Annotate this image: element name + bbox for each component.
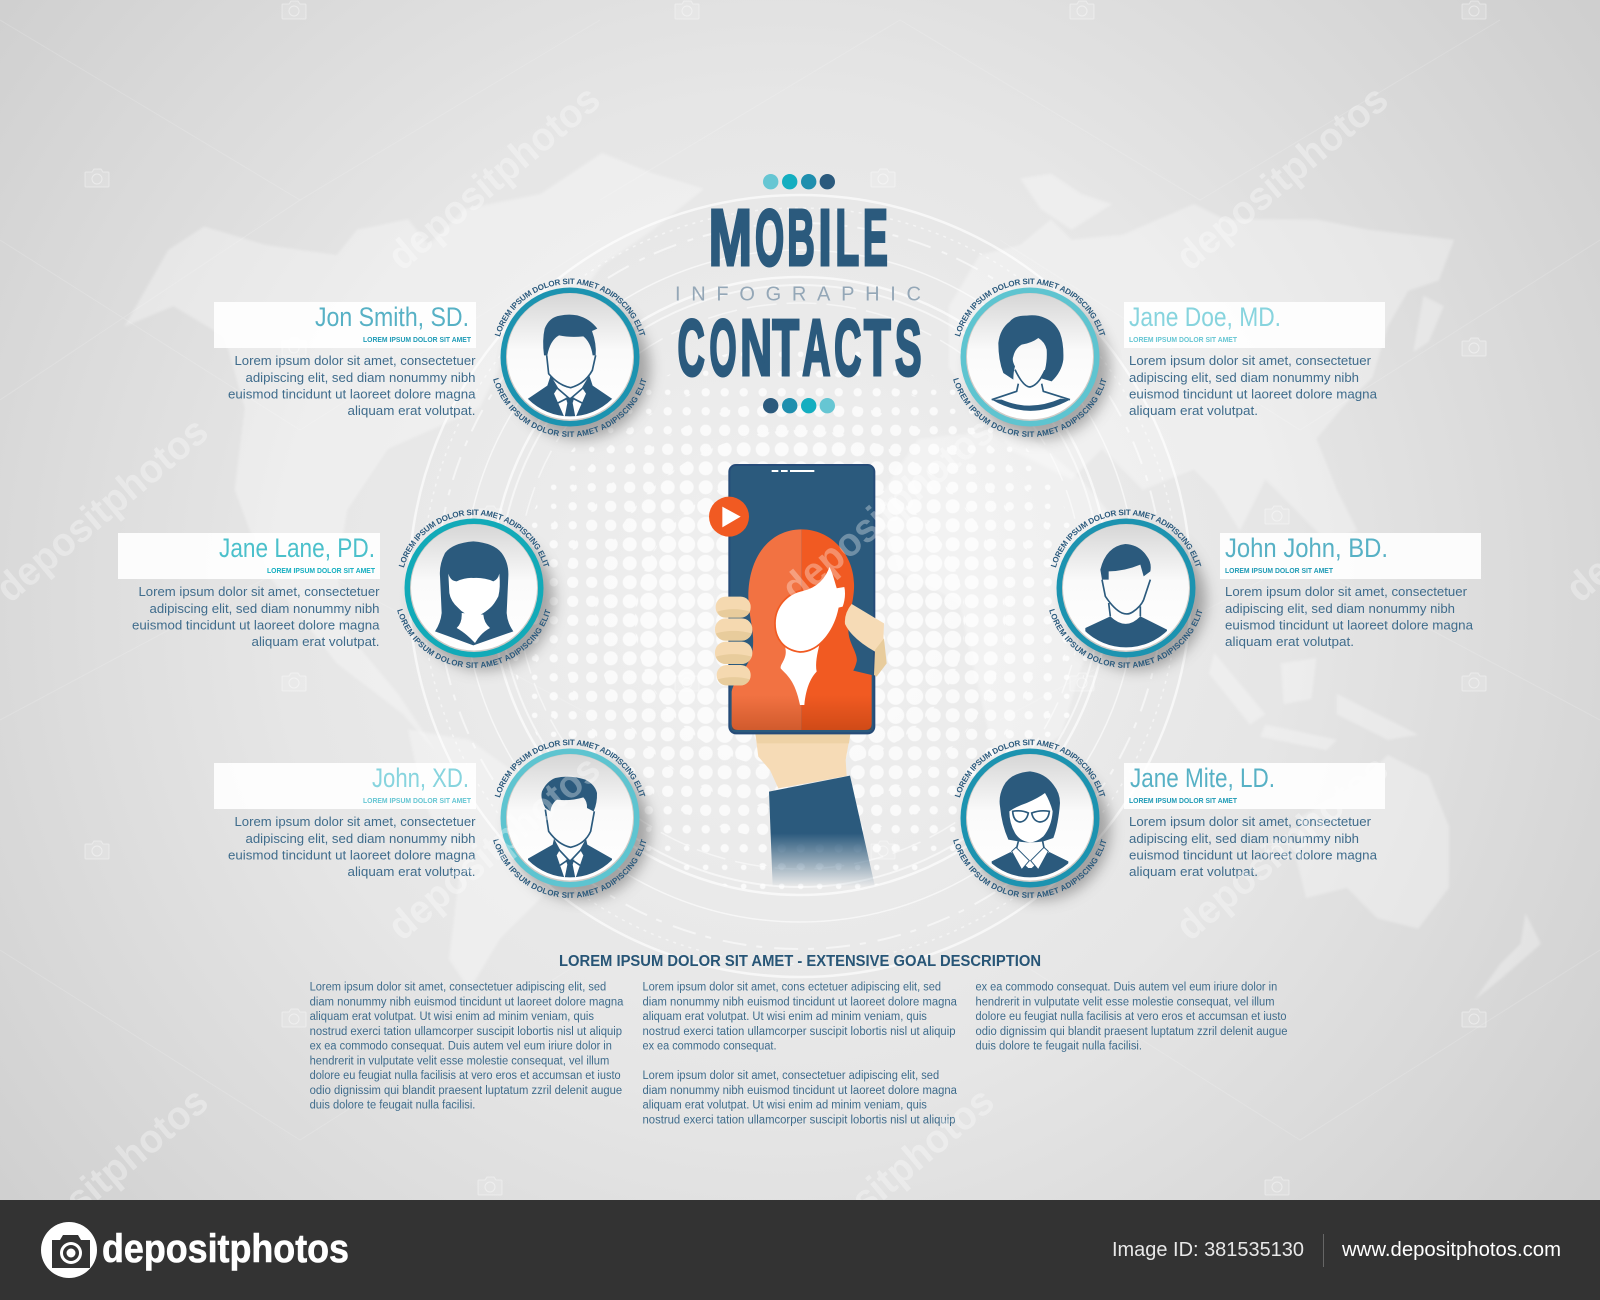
description (1225, 584, 1474, 649)
title top dots (763, 174, 835, 189)
phone body (729, 465, 874, 733)
avatar badge: LOREM IPSUM DOLOR SIT AMET ADIPISCING ELIT (493, 378, 646, 437)
avatar badge (953, 278, 1118, 447)
title: CONTACTS: O (709, 303, 737, 392)
card: Jane Doe (953, 278, 1385, 447)
card: John John (1049, 510, 1481, 678)
text column 1: Lorem ipsum dolor sit amet, consectetuer adipiscing elit, sed (310, 982, 606, 994)
avatar badge: LOREM IPSUM DOLOR SIT AMET ADIPISCING ELIT (953, 838, 1106, 898)
name band: LOREM IPSUM DOLOR SIT AMET (1129, 796, 1237, 805)
heading: goal description: LOREM IPSUM DOLOR SIT AMET - EXTENSIVE GOAL DESCRIPTION (559, 953, 1041, 970)
name band: Jane Mite, LD. (1130, 763, 1275, 793)
name band: LOREM IPSUM DOLOR SIT AMET (1129, 335, 1237, 344)
name band: LOREM IPSUM DOLOR SIT AMET (363, 335, 471, 344)
name band (1124, 763, 1385, 809)
concentric rings (409, 195, 1191, 977)
description: aliquam erat volutpat. (1225, 634, 1354, 649)
text column 2: nostrud exerci tation ullamcorper suscipit lobortis nisl ut aliquip (642, 1114, 956, 1126)
title: MOBILE: I (818, 193, 832, 282)
description: euismod tincidunt ut laoreet dolore magna (228, 387, 476, 402)
footer logo (41, 1222, 349, 1278)
avatar badge: LOREM IPSUM DOLOR SIT AMET ADIPISCING ELIT (397, 608, 550, 668)
text column 1: dolore eu feugiat nulla facilisis at vero eros et accumsan et iusto (310, 1070, 621, 1082)
text column 3: ex ea commodo consequat. Duis autem vel eum iriure dolor in (976, 982, 1277, 994)
footer logo: depositphotos (102, 1227, 349, 1271)
name band (214, 763, 476, 809)
text column 1: diam nonummy nibh euismod tincidunt ut laoreet dolore magna (310, 996, 624, 1008)
card: John XD (214, 740, 658, 908)
avatar badge: LOREM IPSUM DOLOR SIT AMET ADIPISCING ELIT (494, 278, 646, 336)
fingers (715, 597, 752, 685)
stock watermarks: depositphotos (774, 1079, 1002, 1281)
title bottom dots (763, 398, 835, 413)
avatar badge: LOREM IPSUM DOLOR SIT AMET ADIPISCING ELIT (1049, 608, 1202, 668)
avatar badge: LOREM IPSUM DOLOR SIT AMET ADIPISCING ELIT (953, 378, 1106, 437)
description: Lorem ipsum dolor sit amet, consectetuer (234, 814, 476, 829)
text column 2 (642, 982, 957, 1126)
description: euismod tincidunt ut laoreet dolore magna (132, 618, 380, 633)
avatar badge (493, 740, 658, 908)
title: CONTACTS (678, 303, 922, 392)
avatar badge (1049, 510, 1214, 678)
avatar badge (493, 278, 658, 446)
stock watermarks: depositphotos (1168, 77, 1396, 279)
description: Lorem ipsum dolor sit amet, consectetuer (234, 353, 476, 368)
website: www.depositphotos.com (1341, 1239, 1561, 1261)
description (1129, 353, 1378, 418)
title: MOBILE: B (787, 193, 815, 282)
text column 2: Lorem ipsum dolor sit amet, consectetuer adipiscing elit, sed (642, 1070, 939, 1082)
illustration: hand holding phone (709, 465, 887, 887)
avatar badge: LOREM IPSUM DOLOR SIT AMET ADIPISCING ELIT (954, 740, 1106, 798)
description: Lorem ipsum dolor sit amet, consectetuer (1129, 353, 1372, 368)
name band: John, XD. (372, 763, 469, 793)
title: MOBILE: O (755, 193, 784, 282)
description: Lorem ipsum dolor sit amet, consectetuer (138, 584, 380, 599)
text column 3 (976, 982, 1288, 1052)
title: CONTACTS: C (834, 303, 861, 392)
description: aliquam erat volutpat. (1129, 864, 1258, 879)
name band: Jane Doe, MD. (1129, 302, 1281, 332)
text column 1: duis dolore te feugait nulla facilisi. (310, 1100, 475, 1112)
video portrait (732, 529, 872, 730)
text column 3: dolore eu feugiat nulla facilisis at vero eros et accumsan et iusto (976, 1011, 1286, 1023)
name band: LOREM IPSUM DOLOR SIT AMET (267, 566, 375, 575)
title block (675, 174, 922, 413)
stock watermarks: depositphotos (774, 409, 1002, 611)
description: adipiscing elit, sed diam nonummy nibh (1129, 831, 1359, 846)
image id: Image ID: 381535130 (1112, 1239, 1304, 1261)
description (228, 353, 476, 418)
name band: Jane Lane, PD. (219, 533, 375, 563)
description: aliquam erat volutpat. (348, 864, 476, 879)
subtitle: INFOGRAPHIC: INFOGRAPHIC (675, 284, 921, 306)
thumb (845, 604, 887, 677)
title: MOBILE (709, 193, 888, 282)
stock watermarks: depositphotos (1168, 747, 1396, 949)
stock watermarks: depositphotos (380, 77, 608, 279)
description: aliquam erat volutpat. (252, 634, 380, 649)
description: adipiscing elit, sed diam nonummy nibh (1225, 601, 1455, 616)
text column 1 (310, 982, 624, 1112)
phone speaker (772, 470, 814, 472)
text column 2: Lorem ipsum dolor sit amet, cons ectetuer adipiscing elit, sed (642, 982, 941, 994)
text column 1: ex ea commodo consequat. Duis autem vel eum iriure dolor in (310, 1040, 612, 1052)
text column 2: aliquam erat volutpat. Ut wisi enim ad minim veniam, quis (642, 1011, 927, 1023)
avatar badge: LOREM IPSUM DOLOR SIT AMET ADIPISCING ELIT (1050, 510, 1202, 568)
description: euismod tincidunt ut laoreet dolore magna (228, 848, 476, 863)
palm (755, 732, 851, 788)
text column 2: aliquam erat volutpat. Ut wisi enim ad minim veniam, quis (642, 1100, 927, 1112)
card: Jane Lane (118, 510, 562, 678)
text column 1: nostrud exerci tation ullamcorper suscipit lobortis nisl ut aliquip (310, 1026, 622, 1038)
stock watermarks: depositphotos (380, 747, 608, 949)
avatar badge: LOREM IPSUM DOLOR SIT AMET ADIPISCING ELIT (494, 740, 646, 798)
description: euismod tincidunt ut laoreet dolore magna (1129, 848, 1378, 863)
description: aliquam erat volutpat. (348, 403, 476, 418)
title: CONTACTS: C (678, 303, 705, 392)
card: Jon Smith (214, 278, 658, 446)
text column 2: ex ea commodo consequat. (642, 1040, 776, 1052)
title: CONTACTS: T (772, 303, 799, 392)
name band: John John, BD. (1225, 533, 1388, 563)
title: CONTACTS: S (895, 303, 922, 392)
description: adipiscing elit, sed diam nonummy nibh (246, 831, 476, 846)
text column 3: duis dolore te feugait nulla facilisi. (976, 1040, 1142, 1052)
card: Jane Mite (953, 740, 1385, 908)
description (132, 584, 380, 649)
title: CONTACTS: N (740, 303, 772, 392)
description: adipiscing elit, sed diam nonummy nibh (246, 370, 476, 385)
text column 2: diam nonummy nibh euismod tincidunt ut laoreet dolore magna (642, 996, 957, 1008)
avatar badge: LOREM IPSUM DOLOR SIT AMET ADIPISCING ELIT (954, 278, 1106, 336)
title: CONTACTS: T (864, 303, 891, 392)
name band: Jon Smith, SD. (315, 302, 469, 332)
description: Lorem ipsum dolor sit amet, consectetuer (1129, 814, 1372, 829)
world map (124, 153, 1541, 1000)
avatar badge: LOREM IPSUM DOLOR SIT AMET ADIPISCING ELIT (493, 838, 646, 898)
text column 3: hendrerit in vulputate velit esse molestie consequat, vel illum (976, 996, 1274, 1008)
description: adipiscing elit, sed diam nonummy nibh (150, 601, 380, 616)
title: MOBILE: M (709, 193, 752, 282)
forearm sleeve (769, 776, 875, 887)
name band: LOREM IPSUM DOLOR SIT AMET (1225, 566, 1333, 575)
avatar badge: LOREM IPSUM DOLOR SIT AMET ADIPISCING ELIT (398, 510, 550, 568)
play button (709, 497, 749, 537)
name band (118, 533, 380, 579)
description: euismod tincidunt ut laoreet dolore magna (1129, 387, 1378, 402)
name band (1124, 302, 1385, 348)
description: Lorem ipsum dolor sit amet, consectetuer (1225, 584, 1468, 599)
text column 1: hendrerit in vulputate velit esse molestie consequat, vel illum (310, 1055, 609, 1067)
avatar badge (397, 510, 562, 678)
halftone dot globe (510, 345, 1090, 895)
name band (1220, 533, 1481, 579)
name band (214, 302, 476, 348)
avatar badge (953, 740, 1118, 908)
text column 3: odio dignissim qui blandit praesent luptatum zzril delenit augue (976, 1026, 1288, 1038)
text column 1: aliquam erat volutpat. Ut wisi enim ad minim veniam, quis (310, 1011, 594, 1023)
title: CONTACTS: A (802, 303, 830, 392)
text column 1: odio dignissim qui blandit praesent luptatum zzril delenit augue (310, 1085, 622, 1097)
text column 2: diam nonummy nibh euismod tincidunt ut laoreet dolore magna (642, 1085, 957, 1097)
footer bar (0, 1200, 1600, 1300)
description: adipiscing elit, sed diam nonummy nibh (1129, 370, 1359, 385)
title: MOBILE: L (835, 193, 859, 282)
description: aliquam erat volutpat. (1129, 403, 1258, 418)
description (1129, 814, 1378, 879)
description: euismod tincidunt ut laoreet dolore magna (1225, 618, 1474, 633)
title block: E (863, 193, 888, 282)
description (228, 814, 476, 879)
name band: LOREM IPSUM DOLOR SIT AMET (363, 796, 471, 805)
text column 2: nostrud exerci tation ullamcorper suscipit lobortis nisl ut aliquip (642, 1026, 956, 1038)
